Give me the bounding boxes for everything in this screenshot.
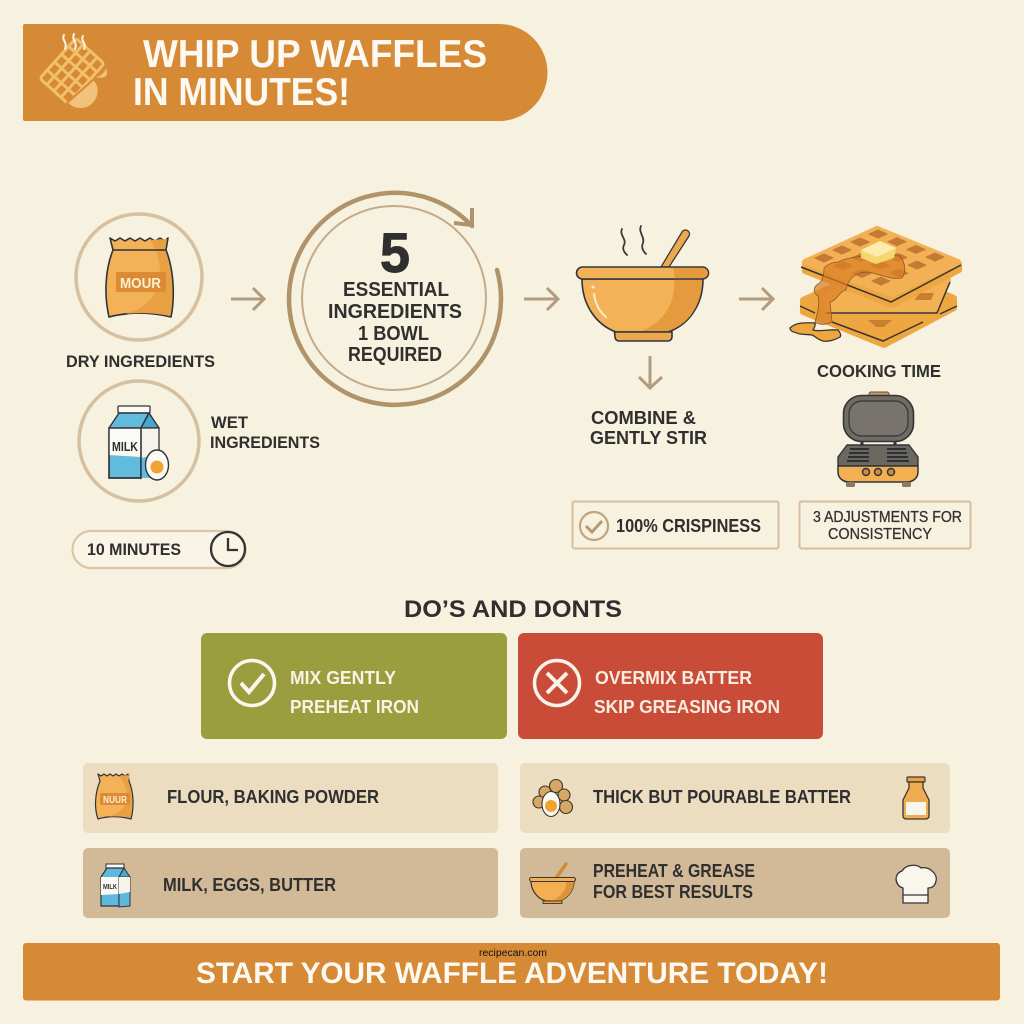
title text: WHIP UP WAFFLES	[143, 33, 487, 76]
panel: milk, eggs, butter: MILK, EGGS, BUTTER	[163, 875, 336, 895]
callout: 3 adjustments for consistency: CONSISTENCY	[828, 526, 932, 543]
central ring: 5 essential ingredients: REQUIRED	[348, 344, 442, 366]
icon: check in circle	[230, 660, 274, 706]
icon: milk carton and egg: MILK	[112, 439, 138, 454]
label: wet ingredients	[210, 413, 320, 452]
dry ingredients step	[66, 214, 215, 371]
footer banner	[23, 943, 1000, 1000]
central ring: 5 essential ingredients: ESSENTIAL	[343, 279, 449, 301]
arrow: dry to count	[231, 288, 264, 310]
label: dry ingredients: DRY INGREDIENTS	[66, 352, 215, 371]
icon: eggs	[533, 780, 572, 816]
panel: preheat and grease: PREHEAT & GREASE	[593, 861, 755, 881]
icon: check circle	[580, 512, 608, 540]
arrow: bowl to waffles	[739, 288, 773, 310]
icon: small flour bag	[96, 774, 133, 819]
panel: preheat and grease: FOR BEST RESULTS	[593, 882, 753, 902]
arrow: bowl down to combine	[639, 356, 662, 388]
panel: do's: MIX GENTLY	[290, 668, 396, 688]
call to action: START YOUR WAFFLE ADVENTURE TODAY!	[196, 957, 828, 990]
panel: thick but pourable batter	[520, 763, 950, 833]
icon: waffle with steam	[40, 34, 107, 109]
panel: preheat and grease	[520, 848, 950, 918]
panel: do's	[201, 633, 507, 739]
icon: waffle iron	[838, 392, 918, 487]
heading: do's and donts: DO’S AND DONTS	[404, 596, 622, 623]
time pill: 10 minutes: 10 MINUTES	[87, 540, 181, 559]
central ring: 5 essential ingredients: INGREDIENTS	[328, 301, 462, 323]
label: combine and gently stir: COMBINE &	[591, 407, 696, 428]
icon: bottle	[903, 777, 929, 819]
central ring: 5 essential ingredients: 1 BOWL	[358, 323, 429, 345]
panel: donts	[518, 633, 823, 739]
wet ingredients step	[79, 381, 320, 501]
watermark: recipecan.com	[479, 948, 547, 959]
icon: small milk carton	[101, 864, 130, 907]
title text: IN MINUTES!	[133, 71, 350, 114]
callout: 3 adjustments for consistency	[800, 502, 970, 548]
icon: mixing bowl with spoon and steam	[576, 226, 708, 341]
label: combine and gently stir: GENTLY STIR	[590, 427, 707, 448]
icon: small flour bag: NUUR	[103, 795, 128, 806]
label: wet ingredients: WET	[211, 413, 249, 432]
panel: donts: OVERMIX BATTER	[595, 668, 752, 688]
icon: small bowl	[530, 864, 576, 904]
title text	[133, 33, 487, 114]
panel: thick but pourable batter: THICK BUT POURABLE BATTER	[593, 787, 851, 807]
time pill: 10 minutes	[72, 531, 246, 568]
icon: clock	[211, 532, 245, 566]
arrow: count to bowl	[524, 288, 558, 310]
callout: 100% crispiness: 100% CRISPINESS	[616, 516, 761, 536]
panel: do's: PREHEAT IRON	[290, 697, 419, 717]
callout: 3 adjustments for consistency: 3 ADJUSTMENTS FOR	[813, 509, 962, 526]
icon: flour bag	[76, 214, 202, 340]
icon: chef hat	[896, 865, 936, 903]
panel: flour, baking powder	[83, 763, 498, 833]
panel: flour, baking powder: FLOUR, BAKING POWDER	[167, 787, 379, 807]
title banner	[23, 24, 547, 121]
icon: waffle stack with syrup and butter	[790, 229, 961, 345]
panel: milk, eggs, butter	[83, 848, 498, 918]
central ring: 5 essential ingredients	[289, 193, 501, 405]
central ring: 5 essential ingredients: 5	[380, 221, 410, 284]
panel: donts: SKIP GREASING IRON	[594, 697, 780, 717]
label: cooking time: COOKING TIME	[817, 361, 941, 381]
icon: cross in circle	[534, 660, 580, 706]
icon: flour bag: MOUR	[120, 275, 161, 292]
icon: milk carton and egg	[79, 381, 199, 501]
icon: small milk carton: MILK	[103, 884, 117, 891]
label: wet ingredients: INGREDIENTS	[210, 433, 320, 452]
callout: 100% crispiness	[572, 502, 778, 548]
label: combine and gently stir	[590, 407, 707, 448]
